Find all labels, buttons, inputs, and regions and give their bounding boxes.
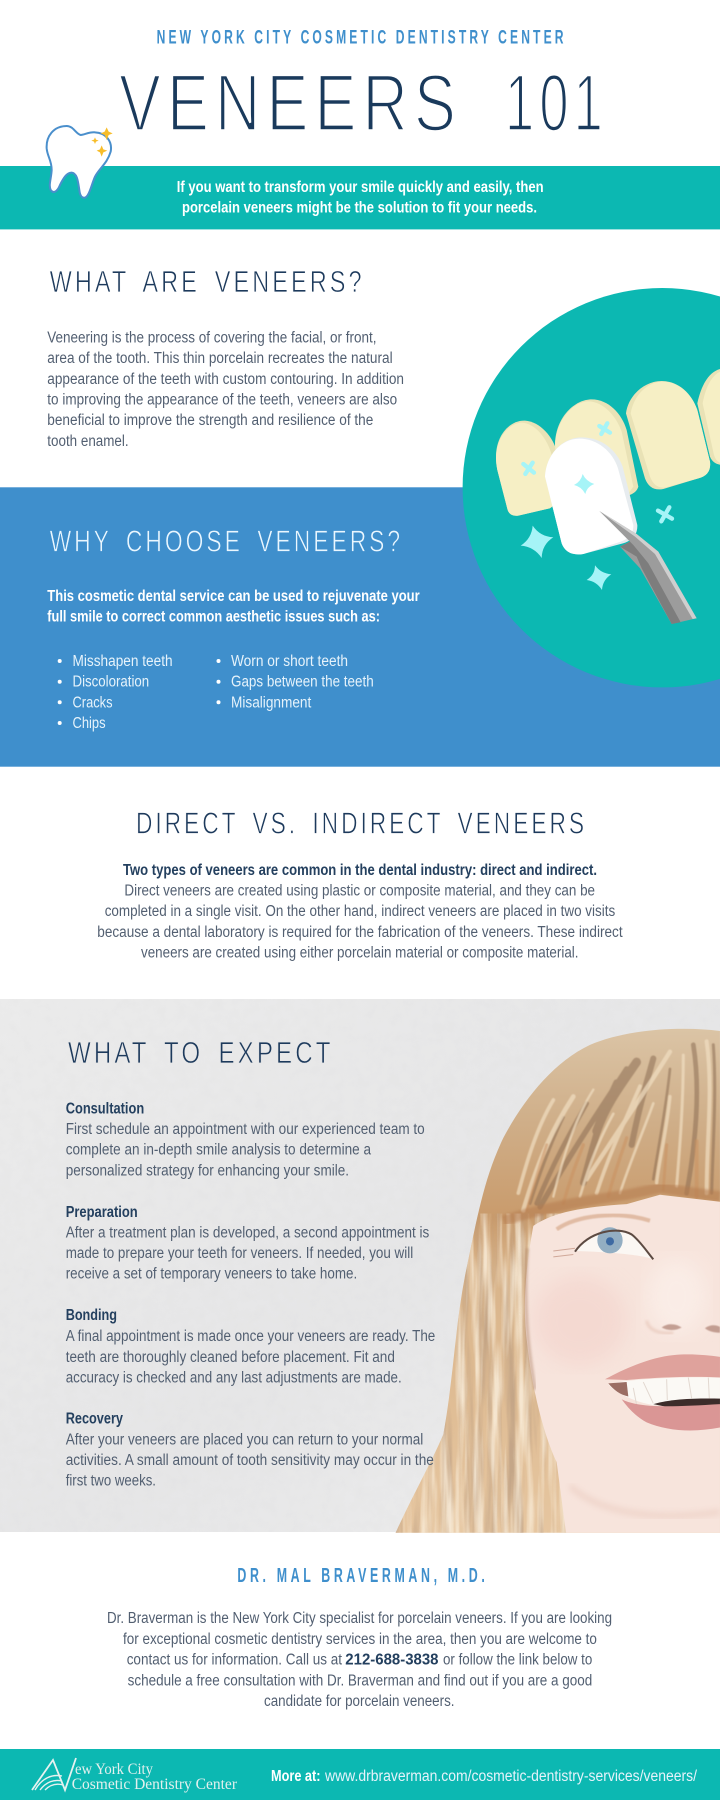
logo: New York City Cosmetic Dentistry Center: ew York City <box>75 1761 153 1778</box>
panel: direct vs indirect <box>97 805 623 962</box>
text block: direct vs indirect: veneers are created using either porcelain material or composite material. <box>141 945 578 962</box>
step: recovery: After your veneers are placed you can return to your normal <box>66 1432 423 1449</box>
text block: veneer definition: appearance of the teeth with custom contouring. In addition <box>47 371 404 388</box>
text block: veneer definition: area of the tooth. This thin porcelain recreates the natural <box>47 350 393 367</box>
mouth <box>605 1354 720 1430</box>
step: recovery <box>66 1411 434 1490</box>
banner text: If you want to transform your smile quickly and easily, then <box>177 179 544 196</box>
text block: doctor bio: or follow the link below to <box>443 1652 592 1669</box>
hair <box>393 1021 720 1538</box>
step: recovery: Recovery <box>66 1411 123 1428</box>
panel: what are veneers <box>47 264 404 450</box>
logo: New York City Cosmetic Dentistry Center <box>32 1758 238 1793</box>
hair strands: lower length <box>393 1214 567 1538</box>
tooth: left <box>496 421 567 516</box>
illustration: veneer placed on teeth <box>463 288 720 687</box>
step: preparation: After a treatment plan is developed, a second appointment is <box>66 1224 430 1241</box>
eye <box>575 1227 653 1259</box>
step: bonding: accuracy is checked and any last adjustments are made. <box>66 1370 402 1386</box>
step: consultation <box>66 1100 425 1179</box>
text block: direct vs indirect: Direct veneers are created using plastic or composite material, and they can be <box>124 882 595 900</box>
step: bonding: teeth are thoroughly cleaned before placement. Fit and <box>66 1349 395 1366</box>
sparkle: crosses <box>523 423 672 521</box>
list: aesthetic issues, left column: Discoloration <box>72 674 149 691</box>
text block: veneer definition: to improving the appearance of the teeth, veneers are also <box>47 392 397 408</box>
icon: sparkling tooth <box>47 126 113 198</box>
step: recovery: activities. A small amount of tooth sensitivity may occur in the <box>66 1452 434 1469</box>
intro banner <box>0 166 720 229</box>
step: preparation <box>66 1204 430 1283</box>
text block: direct vs indirect: because a dental laboratory is required for the fabrication of the veneers. These indirect <box>97 924 623 941</box>
tooth: fourth <box>697 368 720 465</box>
list: aesthetic issues, right column: Misalignment <box>231 694 312 711</box>
text block: veneer definition: beneficial to improve the strength and resilience of the <box>47 412 373 429</box>
nose <box>662 1324 720 1333</box>
text block: doctor bio: 212-688-3838 <box>345 1652 439 1669</box>
text block: doctor bio: Dr. Braverman is the New York City specialist for porcelain veneers. If you are looking <box>107 1610 612 1627</box>
step: bonding: A final appointment is made once your veneers are ready. The <box>66 1328 435 1345</box>
text block: doctor bio: candidate for porcelain veneers. <box>264 1693 454 1710</box>
tooth: second <box>555 399 638 507</box>
text block: doctor bio: for exceptional cosmetic dentistry services in the area, then you are welcome to <box>123 1631 597 1648</box>
heading: what are veneers: WHAT ARE VENEERS? <box>50 264 365 299</box>
step: recovery: first two weeks. <box>66 1473 156 1490</box>
step: consultation: complete an in-depth smile analysis to determine a <box>66 1142 371 1159</box>
text block: why choose intro: full smile to correct common aesthetic issues such as: <box>47 609 380 626</box>
panel: why choose veneers background <box>0 487 720 767</box>
link: more at: More at: <box>271 1768 320 1785</box>
list: aesthetic issues, left column <box>58 653 173 732</box>
text block: direct vs indirect <box>97 862 623 962</box>
step: preparation: Preparation <box>66 1204 138 1221</box>
eyebrow <box>557 1215 650 1229</box>
tweezers <box>599 511 697 624</box>
tooth: third <box>626 381 710 489</box>
list: aesthetic issues, right column <box>216 653 374 711</box>
title: 101 <box>505 59 608 149</box>
veneer <box>545 437 637 554</box>
step: preparation: made to prepare your teeth for veneers. If needed, you will <box>66 1245 413 1262</box>
banner text: porcelain veneers might be the solution to fit your needs. <box>182 200 537 217</box>
photo: textured wall <box>0 999 720 1532</box>
heading: doctor name: DR. MAL BRAVERMAN, M.D. <box>237 1564 488 1587</box>
text block: veneer definition <box>47 329 404 450</box>
panel: doctor bio <box>107 1564 612 1710</box>
heading: why choose veneers: WHY CHOOSE VENEERS? <box>50 524 403 559</box>
text block: doctor bio <box>107 1610 612 1710</box>
step: consultation: Consultation <box>66 1100 144 1117</box>
text block: why choose intro <box>47 588 420 626</box>
text block: veneer definition: Veneering is the process of covering the facial, or front, <box>47 329 377 346</box>
text block: why choose intro: This cosmetic dental service can be used to rejuvenate your <box>47 588 420 605</box>
banner text <box>177 179 544 217</box>
list: aesthetic issues, left column: Chips <box>72 715 106 732</box>
logo: New York City Cosmetic Dentistry Center: Cosmetic Dentistry Center <box>72 1776 238 1793</box>
footer <box>0 1749 720 1800</box>
panel: why choose veneers <box>47 524 420 732</box>
face <box>525 1195 720 1538</box>
list: aesthetic issues, right column: Gaps between the teeth <box>231 674 374 691</box>
text block: doctor bio: contact us for information. Call us at <box>127 1652 343 1669</box>
text block: direct vs indirect: Two types of veneers are common in the dental industry: direct and indirect. <box>123 862 597 879</box>
panel: what to expect <box>0 999 720 1538</box>
text block: direct vs indirect: completed in a single visit. On the other hand, indirect veneers are placed in two visits <box>105 903 615 920</box>
step: consultation: First schedule an appointment with our experienced team to <box>66 1121 425 1138</box>
photo: smiling woman <box>393 1021 720 1538</box>
step: bonding: Bonding <box>66 1307 117 1324</box>
text block: doctor bio: schedule a free consultation with Dr. Braverman and find out if you are a good <box>128 1672 592 1689</box>
title: VENEERS <box>119 59 462 149</box>
list: aesthetic issues, right column: Worn or short teeth <box>231 653 348 670</box>
step: consultation: personalized strategy for enhancing your smile. <box>66 1162 349 1179</box>
sparkle: four-point stars <box>521 474 611 590</box>
list: aesthetic issues, left column: Cracks <box>72 694 113 711</box>
list: aesthetic issues, left column: Misshapen teeth <box>72 653 173 670</box>
step: preparation: receive a set of temporary veneers to take home. <box>66 1266 357 1283</box>
text block: veneer definition: tooth enamel. <box>47 433 129 450</box>
step: bonding <box>66 1307 435 1386</box>
hair strands: fringe <box>518 1041 715 1210</box>
heading: what to expect: WHAT TO EXPECT <box>68 1035 334 1070</box>
